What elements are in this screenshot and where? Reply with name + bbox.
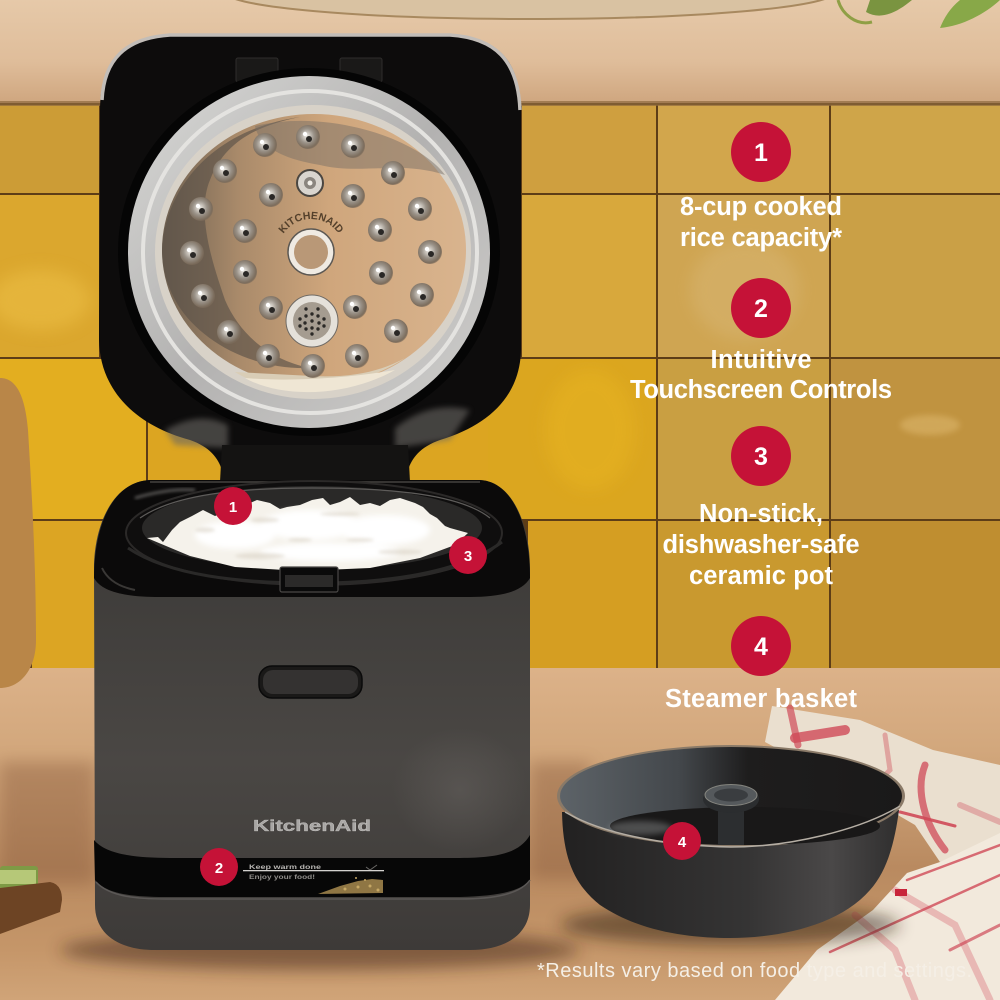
numbered marker 2 on display: 2 [215,860,223,877]
steamer basket [557,745,905,945]
feature 4: Steamer basket [665,685,858,713]
inner pot [126,481,502,592]
feature 1 [680,122,842,252]
numbered marker 3 on pot rim: 3 [464,548,472,565]
rice cooker [94,33,530,950]
yellow tile wall [0,103,1000,668]
numbered marker 4 on basket: 4 [678,834,687,851]
feature 4: 4 [754,633,768,661]
rim opening [94,480,530,597]
feature 1: 1 [754,139,768,167]
feature 2: 2 [754,295,768,323]
center knob with embossed logo: KITCHENAID [278,212,343,234]
feature 1: rice capacity* [680,224,842,252]
touchscreen display: Enjoy your food! [249,874,315,881]
counter shadow band [0,762,590,885]
upper wooden shelf [0,0,1000,106]
plate on shelf [225,0,835,19]
feature 3 [662,426,860,590]
front release button [259,666,362,698]
cooked rice [147,497,468,571]
seal ring [118,68,500,436]
top valve [297,170,323,196]
rice reflection [165,407,470,448]
rivets [180,125,442,378]
hinge [220,445,410,482]
small board with cucumber [0,866,62,934]
hinge tabs [236,58,382,82]
shadow on counter [60,930,580,970]
numbered marker 4 on basket [663,822,701,860]
numbered marker 2 on display [200,848,238,886]
numbered marker 1 on pot: 1 [229,499,237,516]
center knob with embossed logo [278,212,343,276]
pot latch [280,567,338,592]
feature 3: dishwasher-safe [662,531,860,559]
plant leaves [838,0,1000,28]
feature 3: 3 [754,443,768,471]
feature 2: Intuitive [710,346,812,374]
numbered marker 3 on pot rim [449,536,487,574]
feature 3: ceramic pot [689,562,834,590]
footnote: *Results vary based on food type and settings. [537,960,972,982]
background wood counter [0,668,1000,1000]
feature 1: 8-cup cooked [680,193,842,221]
basket center stem [703,784,759,845]
numbered marker 1 on pot [214,487,252,525]
steel inner lid [155,105,471,399]
feature 2: Touchscreen Controls [630,376,892,404]
touchscreen display: Keep warm done [249,864,322,871]
KitchenAid logo: KitchenAid [253,818,371,835]
open lid [99,33,522,468]
feature 3: Non-stick, [699,500,823,528]
feature 4 [665,616,858,713]
feature 2 [630,278,892,404]
base body [94,480,530,950]
perforated steam filter [286,295,338,347]
cutting board at left [0,378,36,688]
touchscreen display [243,864,384,894]
towel [765,706,1000,1000]
